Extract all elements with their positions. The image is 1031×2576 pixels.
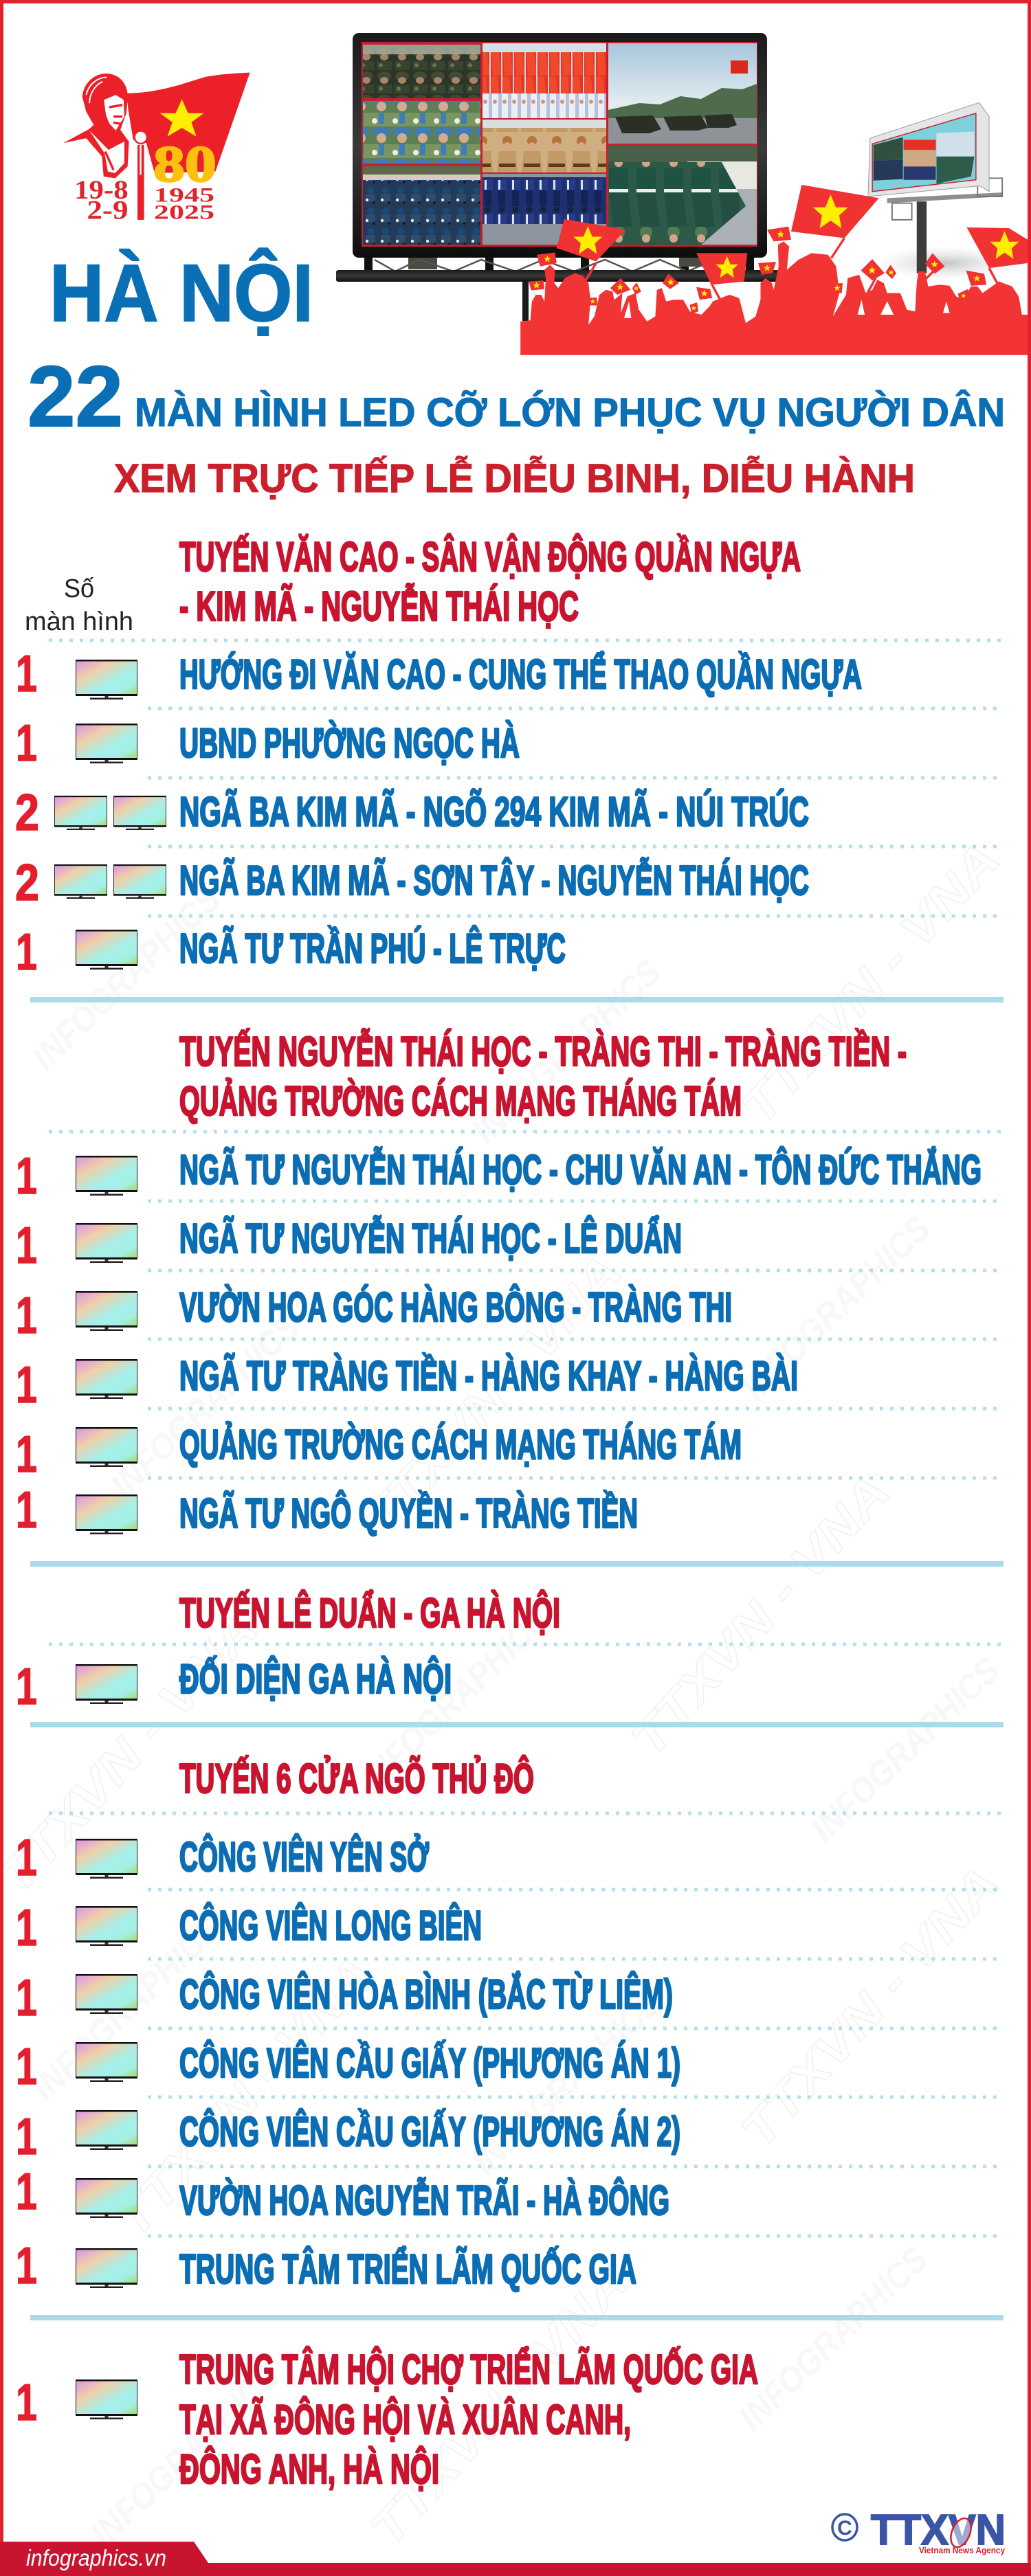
agency tagline: Vietnam News Agency <box>919 2545 1006 2555</box>
flag left <box>557 219 625 261</box>
watermarks: TTXVN - VNA <box>359 2254 639 2556</box>
copyright mark <box>832 2514 857 2540</box>
section 1: Văn Cao route <box>15 534 1004 981</box>
small flags <box>529 227 986 314</box>
row <box>16 1656 452 1715</box>
flag center <box>696 253 747 284</box>
row: 1 <box>16 1969 37 2026</box>
row: NGÃ TƯ NGUYỄN THÁI HỌC - LÊ DUẨN <box>179 1216 682 1262</box>
flag star <box>160 99 204 137</box>
row <box>16 1969 673 2026</box>
row: CÔNG VIÊN YÊN SỞ <box>179 1834 430 1880</box>
section 4 title: TUYẾN 6 CỬA NGÕ THỦ ĐÔ <box>179 1756 534 1802</box>
dates left: 2-9 <box>87 196 129 225</box>
row <box>16 2107 680 2165</box>
watermarks: INFOGRAPHICS <box>465 952 669 1152</box>
small billboard <box>868 102 1019 280</box>
watermarks: INFOGRAPHICS <box>24 1909 228 2109</box>
watermarks: INFOGRAPHICS <box>803 1650 1008 1850</box>
photo: blue berets <box>363 101 480 164</box>
portrait <box>63 74 129 178</box>
heading: LED screens subtitle: MÀN HÌNH LED CỠ LỚN PHỤC VỤ NGƯỜI DÂN <box>135 390 1005 435</box>
number 80: 80 <box>153 136 217 193</box>
copyright mark: C <box>837 2517 852 2540</box>
location text: ĐÔNG ANH, HÀ NỘI <box>179 2446 439 2492</box>
row <box>16 1422 742 1483</box>
photo: navy uniforms <box>483 174 606 245</box>
heading: Hà Nội: HÀ NỘI <box>49 247 313 339</box>
row: UBND PHƯỜNG NGỌC HÀ <box>179 720 520 766</box>
row <box>15 853 809 911</box>
row: 1 <box>16 1356 37 1413</box>
section 1 title: - KIM MÃ - NGUYỄN THÁI HỌC <box>179 583 579 629</box>
photo: green uniforms <box>608 146 757 245</box>
flag poles <box>586 238 999 302</box>
column header: number of screens: Số <box>64 574 94 603</box>
watermarks: INFOGRAPHICS <box>24 879 228 1078</box>
photo: red flags <box>483 43 606 118</box>
row <box>16 1828 430 1886</box>
section 2 title <box>179 1029 907 1124</box>
flag far right <box>967 227 1028 268</box>
row: ĐỐI DIỆN GA HÀ NỘI <box>179 1656 452 1702</box>
flag large right <box>791 185 879 238</box>
row: 1 <box>16 1657 37 1715</box>
row: 1 <box>16 923 37 981</box>
row <box>16 714 520 772</box>
row <box>16 2037 680 2095</box>
years right: 2025 <box>154 201 214 223</box>
row <box>16 1284 732 1344</box>
section 2: Nguyễn Thái Học route <box>16 1029 1004 1538</box>
row: NGÃ TƯ TRẦN PHÚ - LÊ TRỰC <box>179 926 566 972</box>
flag <box>126 73 250 173</box>
location text: TẠI XÃ ĐÔNG HỘI VÀ XUÂN CANH, <box>179 2397 631 2443</box>
section 4: six gateways route <box>16 1756 1004 2294</box>
heading: watch parade live: XEM TRỰC TIẾP LỄ DIỄU BINH, DIỄU HÀNH <box>114 456 915 501</box>
row: 1 <box>16 2037 37 2095</box>
row: VƯỜN HOA GÓC HÀNG BÔNG - TRÀNG THI <box>179 1284 732 1330</box>
billboard frame <box>353 33 767 258</box>
row <box>16 1353 798 1413</box>
agency name: TTXVN <box>871 2507 1006 2554</box>
section 1 title <box>179 534 801 629</box>
row: 1 <box>16 1481 37 1538</box>
post <box>917 201 927 273</box>
crowd gaps <box>624 300 950 318</box>
row: 1 <box>16 1828 37 1886</box>
row <box>15 783 809 841</box>
watermarks: INFOGRAPHICS <box>103 1307 307 1506</box>
heading: 22 number: 22 <box>27 349 123 445</box>
watermarks: INFOGRAPHICS <box>731 2239 935 2439</box>
row <box>16 1147 982 1205</box>
row <box>16 2237 636 2294</box>
section 3 title: TUYẾN LÊ DUẨN - GA HÀ NỘI <box>179 1590 560 1636</box>
row: CÔNG VIÊN HÒA BÌNH (BẮC TỪ LIÊM) <box>179 1971 673 2017</box>
panel photos <box>874 137 903 161</box>
row: 2 <box>15 853 39 911</box>
footer band <box>0 2542 1031 2576</box>
TTXVN logo <box>832 2507 1006 2555</box>
platform <box>887 192 1002 203</box>
row: 1 <box>16 1216 37 1274</box>
row: CÔNG VIÊN CẦU GIẤY (PHƯƠNG ÁN 2) <box>179 2109 680 2155</box>
watermarks: TTXVN - VNA <box>731 1856 1010 2158</box>
watermarks: INFOGRAPHICS <box>353 1600 557 1800</box>
row: 1 <box>16 714 37 772</box>
location text <box>179 2347 758 2492</box>
ground shadow <box>874 246 1019 280</box>
row: 1 <box>16 1425 37 1483</box>
column header: number of screens: màn hình <box>25 607 133 636</box>
billboard stand <box>336 247 779 321</box>
dates left <box>74 176 129 225</box>
row: TRUNG TÂM TRIỂN LÃM QUỐC GIA <box>179 2246 636 2292</box>
watermarks: INFOGRAPHICS <box>734 1209 938 1408</box>
microphone <box>135 131 147 220</box>
screen icon <box>76 2379 137 2419</box>
photo: tanks <box>608 43 757 144</box>
website: infographics.vn <box>26 2545 166 2571</box>
column header: number of screens <box>25 574 133 636</box>
years right: 1945 <box>154 184 214 207</box>
large LED billboard <box>336 33 779 321</box>
row: 2 <box>15 783 39 841</box>
row: 1 <box>16 2162 37 2220</box>
row <box>16 645 862 702</box>
years right <box>154 184 214 223</box>
watermarks: TTXVN - VNA <box>731 832 1010 1134</box>
row: CÔNG VIÊN CẦU GIẤY (PHƯƠNG ÁN 1) <box>179 2040 680 2086</box>
row: VƯỜN HOA NGUYỄN TRÃI - HÀ ĐÔNG <box>179 2177 669 2224</box>
row <box>16 1899 482 1956</box>
row: NGÃ TƯ NGÔ QUYỀN - TRÀNG TIỀN <box>179 1490 638 1536</box>
watermarks: TTXVN - VNA <box>353 1244 632 1546</box>
count: 1 <box>16 2373 37 2431</box>
panel <box>868 102 989 197</box>
logo: 80 years emblem <box>63 73 250 225</box>
dates left: 19-8 <box>74 176 129 205</box>
row: 1 <box>16 645 37 702</box>
section 3: Lê Duẩn route <box>16 1590 1004 1715</box>
section 5: national exhibition center <box>16 2347 758 2492</box>
row <box>16 2162 669 2224</box>
watermarks: TTXVN - VNA <box>621 1464 900 1766</box>
watermarks: INFOGRAPHICS <box>465 1984 669 2183</box>
row <box>16 1216 682 1274</box>
row <box>16 923 566 981</box>
row: 1 <box>16 1286 37 1344</box>
row: CÔNG VIÊN LONG BIÊN <box>179 1903 482 1949</box>
photo: navy camouflage <box>363 166 480 245</box>
row <box>16 1481 638 1538</box>
photo: green helmets <box>363 45 480 98</box>
cheering crowd silhouette <box>520 185 1028 355</box>
row: 1 <box>16 1899 37 1956</box>
watermarks <box>0 832 1010 2556</box>
row: 1 <box>16 2107 37 2165</box>
watermarks: TTXVN - VNA <box>105 1945 384 2247</box>
globe swoosh <box>947 2516 975 2550</box>
row: 1 <box>16 1147 37 1205</box>
photo: khaki soldiers <box>483 120 606 172</box>
row: 1 <box>16 2237 37 2294</box>
watermarks: INFOGRAPHICS <box>83 2356 287 2555</box>
